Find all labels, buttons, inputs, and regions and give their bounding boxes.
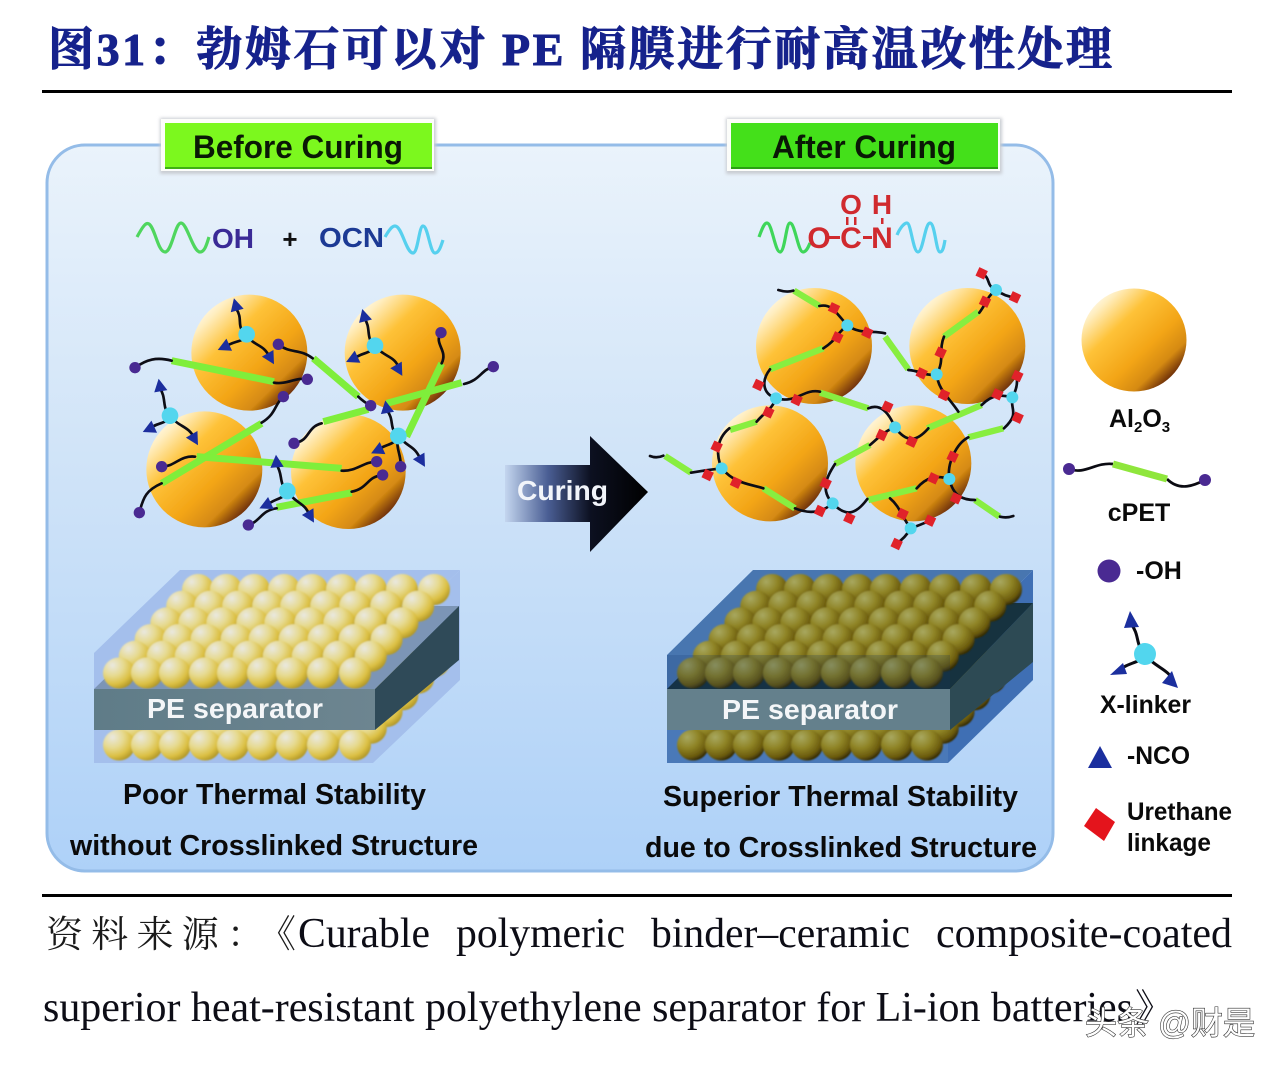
legend: -NCO: -NCO bbox=[1127, 742, 1190, 770]
legend: Al2O3 bbox=[1082, 288, 1186, 436]
caption: poor thermal stability: Poor Thermal Stability bbox=[123, 779, 426, 811]
formula: OH + OCN bbox=[137, 222, 443, 254]
formula: urethane linkage: H bbox=[872, 189, 892, 220]
formula: urethane linkage: C bbox=[840, 222, 862, 255]
caption: superior thermal stability: Superior Thermal Stability bbox=[663, 781, 1018, 813]
source note: superior heat-resistant polyethylene separator for Li-ion batteries bbox=[43, 985, 1133, 1031]
particles: after curing network bbox=[650, 267, 1025, 550]
source note: composite-coated bbox=[936, 911, 1232, 957]
legend: Al2O3: O bbox=[1142, 405, 1162, 433]
caption: superior thermal stability bbox=[645, 781, 1037, 864]
source note: 》 bbox=[1135, 988, 1173, 1030]
legend: urethane linkage bbox=[1084, 798, 1232, 857]
legend: cPET: cPET bbox=[1108, 499, 1170, 527]
legend: X-linker bbox=[1100, 611, 1191, 719]
legend: -OH bbox=[1098, 557, 1182, 585]
source note: 资料来源： bbox=[46, 914, 264, 956]
formula: urethane linkage: O bbox=[840, 189, 862, 220]
source note: polymeric bbox=[456, 911, 625, 957]
particles: before curing network bbox=[129, 295, 499, 531]
arrow: Curing: Curing bbox=[517, 475, 608, 506]
label: Before Curing: Before Curing bbox=[193, 129, 403, 165]
legend: urethane linkage: linkage bbox=[1127, 829, 1211, 857]
source note bbox=[43, 911, 1232, 1031]
legend: Al2O3: 3 bbox=[1162, 419, 1170, 436]
watermark: 头条 @财是 bbox=[1085, 1005, 1255, 1041]
formula: OH + OCN: OH bbox=[212, 223, 254, 254]
caption: superior thermal stability: due to Crosslinked Structure bbox=[645, 832, 1037, 864]
legend bbox=[1063, 288, 1232, 857]
legend: urethane linkage: Urethane bbox=[1127, 798, 1232, 826]
source note: Curable bbox=[298, 911, 430, 957]
formula: OH + OCN: OCN bbox=[319, 222, 384, 253]
formula: urethane linkage: O bbox=[807, 222, 831, 255]
legend: cPET bbox=[1063, 463, 1211, 527]
legend: Al2O3: 2 bbox=[1134, 419, 1142, 436]
caption: poor thermal stability: without Crosslinked Structure bbox=[69, 830, 478, 862]
formula: OH + OCN: + bbox=[282, 224, 298, 254]
legend: X-linker: X-linker bbox=[1100, 691, 1191, 719]
separator: after curing: PE separator bbox=[722, 694, 898, 725]
separator: before curing: PE separator bbox=[147, 693, 323, 724]
separator: before curing bbox=[94, 570, 460, 763]
label: After Curing bbox=[726, 118, 1002, 174]
arrow: Curing bbox=[505, 436, 648, 552]
title: 图31：勃姆石可以对 PE 隔膜进行耐高温改性处理 bbox=[48, 24, 1112, 75]
source note: 《 bbox=[258, 914, 296, 956]
panel: curing diagram background bbox=[47, 145, 1053, 871]
legend: -OH: -OH bbox=[1136, 557, 1182, 585]
label: After Curing: After Curing bbox=[772, 129, 956, 165]
legend: -NCO bbox=[1088, 742, 1190, 770]
formula: urethane linkage bbox=[759, 189, 945, 255]
legend: Al2O3: Al bbox=[1109, 405, 1134, 433]
caption: poor thermal stability bbox=[69, 779, 478, 862]
formula: urethane linkage: N bbox=[871, 222, 893, 255]
source note: binder–ceramic bbox=[651, 911, 910, 957]
label: Before Curing bbox=[160, 118, 436, 174]
separator: after curing bbox=[667, 570, 1033, 763]
